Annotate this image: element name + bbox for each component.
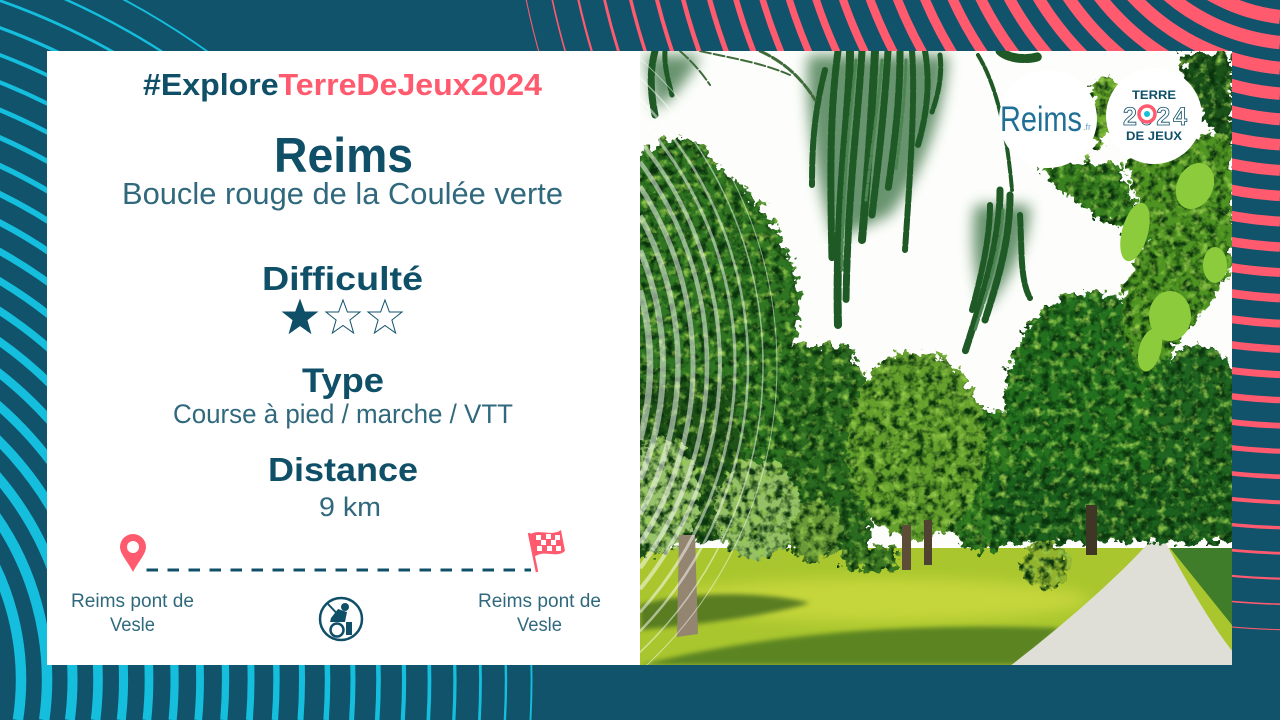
finish label: Vesle xyxy=(517,615,562,636)
pink concentric arcs xyxy=(510,0,1280,630)
logo: Terre de Jeux 2024: TERRE xyxy=(1132,88,1176,102)
overhanging bright leaves xyxy=(1040,51,1232,374)
start label xyxy=(71,591,194,636)
text: distance value: 9 km xyxy=(319,492,381,522)
heading: difficulty: Difficulté xyxy=(262,260,423,297)
left large tree xyxy=(630,137,800,560)
finish label xyxy=(478,591,601,636)
hanging willow branches xyxy=(651,51,1040,352)
start label: Vesle xyxy=(110,615,155,636)
panel: white information card xyxy=(47,51,640,665)
subtitle: route name: Boucle rouge de la Coulée verte xyxy=(122,176,563,211)
text: activity types: Course à pied / marche / VTT xyxy=(173,399,513,429)
cyan concentric arcs xyxy=(0,0,532,720)
route dashed line xyxy=(146,568,531,572)
logo: Terre de Jeux 2024 xyxy=(1106,68,1202,164)
willow foliage mass xyxy=(645,55,1030,310)
shrubs xyxy=(789,500,1069,589)
icon: not wheelchair accessible xyxy=(320,598,362,640)
panel: park photograph xyxy=(626,51,1248,671)
icon: finish flag xyxy=(529,530,565,572)
heading: type: Type xyxy=(302,362,384,400)
logo: Terre de Jeux 2024: DE JEUX xyxy=(1126,129,1182,143)
logo: Reims.fr xyxy=(999,70,1097,168)
heading: distance: Distance xyxy=(268,451,418,488)
logo: Reims.fr: Reims xyxy=(1000,100,1082,139)
white concentric arcs on photo xyxy=(640,59,777,671)
heading: city: Reims xyxy=(274,129,413,183)
title hashtag: #ExploreTerreDeJeux2024 xyxy=(143,67,543,102)
trunks xyxy=(677,505,1097,637)
logo: Reims.fr: .fr xyxy=(1083,122,1091,132)
background trees xyxy=(760,292,1248,552)
central light tree xyxy=(845,351,985,539)
icon: start pin xyxy=(120,534,146,572)
pale weeping willow xyxy=(626,437,801,560)
sky xyxy=(640,51,1232,548)
icon: difficulty stars xyxy=(283,300,402,333)
logo: Terre de Jeux 2024: 2024 xyxy=(1123,103,1187,131)
finish label: Reims pont de xyxy=(478,591,601,612)
lawn xyxy=(640,548,1232,665)
footpath xyxy=(1010,541,1233,666)
start label: Reims pont de xyxy=(71,591,194,612)
